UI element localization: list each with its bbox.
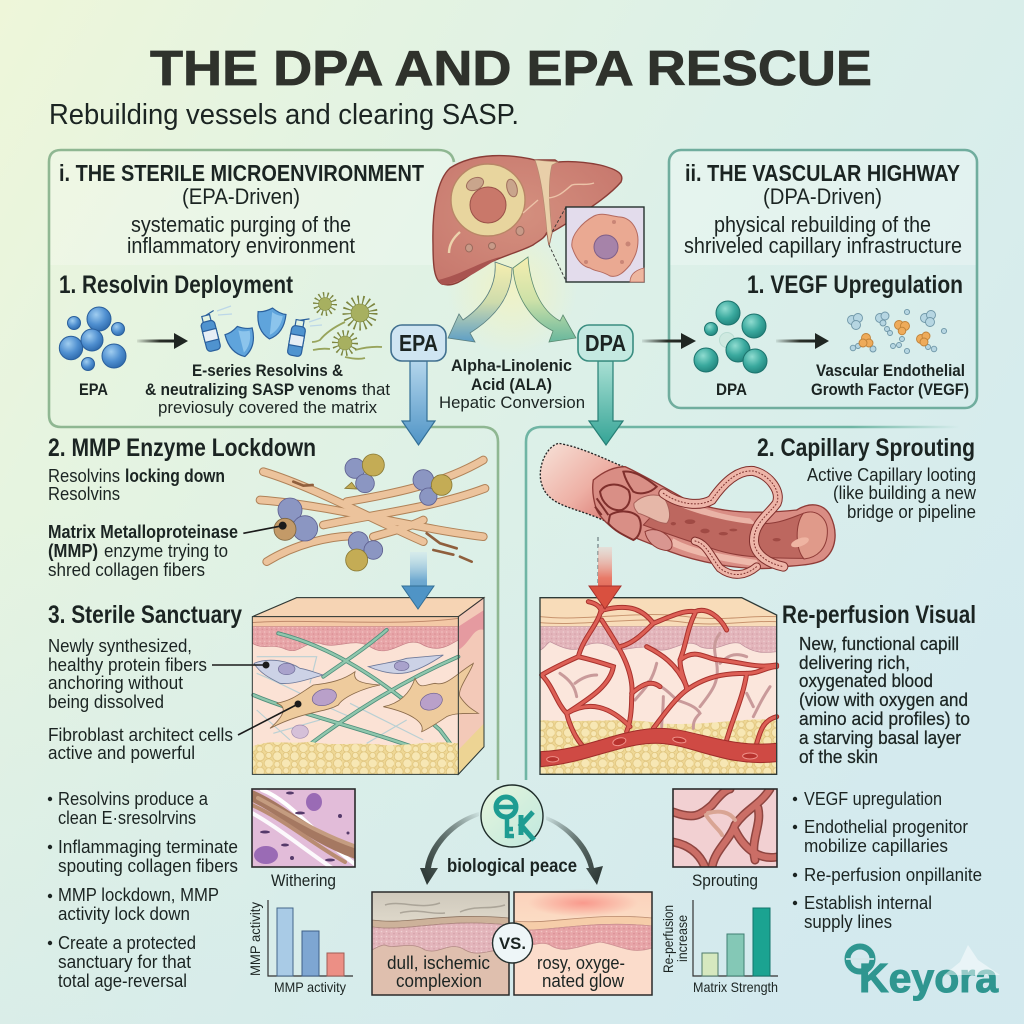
center label: ALA conversion — [439, 356, 585, 412]
text: protein fibers: being dissolved — [48, 692, 164, 712]
bullets: EPA benefits: total age-reversal — [58, 971, 187, 991]
arrow: EPA downward — [402, 361, 435, 445]
arrow head over sanctuary — [402, 586, 434, 609]
label: withering: Withering — [271, 871, 336, 890]
badge: VS: VS. — [499, 934, 526, 953]
label: EPA: EPA — [79, 380, 108, 399]
text: MMP description: (MMP) — [48, 541, 98, 561]
callout line: fibroblast — [238, 700, 302, 735]
comparison: dull complexion: dull, ischemic — [387, 953, 490, 973]
text: resolvins locking down: Resolvins — [48, 466, 120, 486]
subtitle: Rebuilding vessels and clearing SASP. — [49, 99, 519, 131]
bullets: DPA benefits: Endothelial progenitor — [804, 817, 968, 837]
description: rebuilding: physical rebuilding of the — [714, 212, 931, 237]
arrow: DPA pill to panel — [642, 333, 696, 349]
bullets: EPA benefits: Create a protected — [58, 933, 196, 953]
caption: E-series resolvins: that — [362, 380, 390, 399]
description: rebuilding: shriveled capillary infrastructure — [684, 233, 962, 258]
arrow: MMP to sanctuary — [402, 552, 434, 609]
text: re-perfusion description: (viow with oxygen and — [799, 690, 968, 710]
section: re-perfusion visual — [782, 601, 976, 767]
text: MMP description: shred collagen fibers — [48, 560, 205, 580]
text: capillary looting: Active Capillary looting — [807, 465, 976, 485]
text: protein fibers: anchoring without — [48, 673, 183, 693]
illustration: re-perfusion skin — [540, 598, 777, 774]
caption: E-series resolvins — [145, 361, 390, 417]
center label: ALA conversion: Hepatic Conversion — [439, 393, 585, 412]
section heading: sterile microenvironment: i. THE STERILE MICROENVIRONMENT — [59, 160, 424, 186]
comparison: dull complexion — [372, 892, 509, 995]
panel: lower left frame — [396, 427, 498, 780]
illustration: collagen fibers and enzymes — [243, 454, 485, 571]
bullets: DPA benefits — [793, 789, 982, 932]
comparison: dull complexion: complexion — [396, 971, 482, 991]
caption: E-series resolvins: E-series Resolvins & — [192, 361, 343, 380]
arrow: ALA to DPA — [513, 257, 576, 342]
subheading: DPA-driven: (DPA-Driven) — [763, 184, 882, 209]
text: re-perfusion description: a starving basal layer — [799, 728, 961, 748]
text: re-perfusion description: delivering rich, — [799, 653, 910, 673]
arrow: DPA downward — [589, 361, 623, 445]
icon: EPA molecules — [59, 307, 126, 370]
bullets: EPA benefits: clean E·sresolrvins — [58, 808, 196, 828]
text: resolvins locking down — [48, 466, 225, 504]
text: fibroblast cells — [48, 725, 233, 763]
text: fibroblast cells: active and powerful — [48, 743, 195, 763]
arrow: DPA to VEGF — [776, 333, 829, 349]
inset: hepatocyte cell — [566, 207, 644, 282]
icon: key badge — [481, 785, 543, 847]
text: resolvins locking down: locking down — [125, 466, 225, 486]
inset leader line — [549, 207, 566, 281]
pill: EPA: EPA — [399, 330, 438, 356]
text: resolvins locking down: Resolvins — [48, 484, 120, 504]
dashed connector — [597, 537, 599, 584]
histology image: withering — [250, 789, 360, 870]
text: re-perfusion description: New, functional capill — [799, 634, 959, 654]
bullets: EPA benefits: Inflammaging terminate — [58, 837, 238, 857]
panel: lower right frame — [526, 427, 960, 780]
pill: DPA — [578, 325, 633, 445]
bullets: EPA benefits: MMP lockdown, MMP — [58, 885, 219, 905]
title: THE DPA AND EPA RESCUE — [150, 42, 872, 96]
arrow: EPA to resolvins — [137, 333, 188, 349]
bar chart: MMP activity: MMP activity — [247, 902, 263, 976]
icon: VEGF molecules — [848, 309, 947, 354]
illustration: liver — [433, 156, 622, 285]
panel: sterile microenvironment — [49, 150, 454, 427]
bar chart: re-perfusion: Re-perfusion — [660, 905, 676, 973]
description: purging: systematic purging of the — [131, 212, 351, 237]
text: re-perfusion description: oxygenated blood — [799, 671, 933, 691]
comparison: rosy glow: rosy, oxyge- — [537, 953, 625, 973]
caption: VEGF — [811, 361, 969, 399]
bar chart: MMP activity: MMP activity — [274, 979, 346, 995]
section heading: vascular highway: ii. THE VASCULAR HIGHWAY — [685, 160, 960, 186]
arrow: key to dull — [420, 812, 479, 885]
caption: E-series resolvins: previosuly covered the matrix — [158, 398, 377, 417]
text: MMP description: Matrix Metalloproteinase — [48, 522, 238, 542]
text: capillary looting: bridge or pipeline — [847, 502, 976, 522]
text: MMP description: enzyme trying to — [104, 541, 228, 561]
inset image: sprouting — [673, 789, 777, 867]
callout line: protein fibers — [212, 662, 270, 668]
liver glow — [447, 225, 577, 355]
description: rebuilding — [684, 212, 962, 258]
arrow: ALA to EPA — [448, 262, 512, 342]
description: purging — [127, 212, 355, 258]
text: re-perfusion description: of the skin — [799, 747, 878, 767]
heading: capillary sprouting: 2. Capillary Sprouting — [757, 434, 975, 462]
caption: VEGF: Growth Factor (VEGF) — [811, 380, 969, 399]
label: DPA: DPA — [716, 380, 747, 399]
section: sterile sanctuary — [48, 598, 484, 774]
heading: resolvin deployment: 1. Resolvin Deployment — [59, 271, 294, 299]
arrow: key to rosy — [546, 816, 603, 885]
caption: VEGF: Vascular Endothelial — [816, 361, 965, 380]
description: purging: inflammatory environment — [127, 233, 355, 258]
icon: SASP venom particles — [312, 296, 382, 359]
text: capillary looting: (like building a new — [833, 483, 977, 503]
icon: DPA molecules — [694, 301, 767, 373]
pill: DPA: DPA — [585, 330, 626, 356]
bar chart: re-perfusion — [660, 900, 778, 995]
bar chart: re-perfusion: Matrix Strength — [693, 979, 778, 995]
bar chart: re-perfusion: increase — [674, 915, 690, 962]
panel: vascular highway — [669, 150, 977, 408]
text: protein fibers — [48, 636, 207, 712]
pill: EPA — [391, 325, 446, 445]
arrow: sprouting to re-perfusion — [589, 547, 621, 609]
bar chart: MMP activity — [247, 900, 353, 995]
heading: sterile sanctuary: 3. Sterile Sanctuary — [48, 601, 242, 629]
text: protein fibers: healthy protein fibers — [48, 655, 207, 675]
comparison: rosy glow — [514, 889, 652, 995]
bullets: EPA benefits: activity lock down — [58, 904, 190, 924]
logo: Keyora: Keyora — [859, 955, 999, 1001]
bullets: DPA benefits: Establish internal — [804, 893, 932, 913]
illustration: sprouting vessel — [540, 443, 835, 574]
bullets: DPA benefits: VEGF upregulation — [804, 789, 942, 809]
bullets: EPA benefits: Resolvins produce a — [58, 789, 209, 809]
label: sprouting: Sprouting — [692, 871, 758, 890]
center label: ALA conversion: Acid (ALA) — [471, 375, 552, 394]
heading: MMP lockdown: 2. MMP Enzyme Lockdown — [48, 434, 316, 462]
label: biological peace: biological peace — [447, 856, 577, 877]
heading: re-perfusion visual: Re-perfusion Visual — [782, 601, 976, 629]
bullets: DPA benefits: mobilize capillaries — [804, 836, 948, 856]
bullets: EPA benefits: sanctuary for that — [58, 952, 191, 972]
subheading: EPA-driven: (EPA-Driven) — [182, 184, 300, 209]
bullets: DPA benefits: Re-perfusion onpillanite — [804, 865, 982, 885]
text: capillary looting — [807, 465, 977, 522]
comparison: rosy glow: nated glow — [542, 971, 625, 991]
badge: VS — [492, 923, 532, 963]
icon: extinguishers and shields — [198, 306, 322, 360]
heading: VEGF upregulation: 1. VEGF Upregulation — [747, 271, 963, 299]
text: MMP description — [48, 522, 238, 580]
text: re-perfusion description — [799, 634, 970, 767]
bullets: DPA benefits: supply lines — [804, 912, 892, 932]
bullets: EPA benefits — [48, 789, 238, 991]
text: re-perfusion description: amino acid profiles) to — [799, 709, 970, 729]
text: protein fibers: Newly synthesized, — [48, 636, 192, 656]
section: MMP enzyme lockdown — [48, 434, 485, 609]
section: capillary sprouting — [540, 434, 977, 609]
arrow tip over re-perfusion — [589, 586, 621, 609]
bullets: EPA benefits: spouting collagen fibers — [58, 856, 238, 876]
illustration: skin cross-section with fibroblasts — [252, 598, 484, 774]
text: fibroblast cells: Fibroblast architect cells — [48, 725, 233, 745]
caption: E-series resolvins: & neutralizing SASP venoms — [145, 380, 357, 399]
center label: ALA conversion: Alpha-Linolenic — [451, 356, 572, 375]
